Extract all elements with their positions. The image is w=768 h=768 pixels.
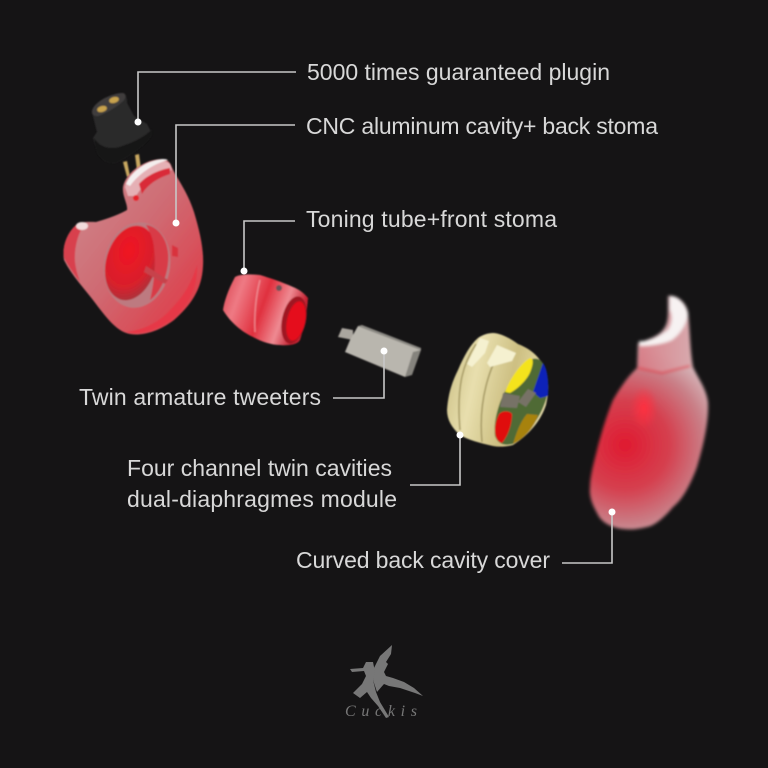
icon: curved back cavity cover xyxy=(590,296,708,529)
logo: fairy Cuckis: Cuckis xyxy=(345,703,417,720)
label: tweeters: Twin armature tweeters xyxy=(79,384,321,410)
leader: plugin xyxy=(134,72,296,126)
label: module: dual-diaphragmes module xyxy=(127,486,397,512)
leader: module xyxy=(410,432,464,485)
label: module: Four channel twin cavities xyxy=(127,455,392,481)
icon: dual diaphragm module xyxy=(447,333,548,447)
label: tube: Toning tube+front stoma xyxy=(306,206,557,232)
label: cover: Curved back cavity cover xyxy=(296,547,550,573)
icon: CNC aluminum cavity shell xyxy=(64,159,203,334)
label: module xyxy=(127,455,397,512)
label: plugin: 5000 times guaranteed plugin xyxy=(307,59,610,85)
label: cavity: CNC aluminum cavity+ back stoma xyxy=(306,113,658,139)
leader: cover xyxy=(562,508,616,563)
leader: cavity xyxy=(172,125,295,226)
icon: plugin connector xyxy=(92,93,152,177)
icon: armature tweeter xyxy=(338,325,421,377)
leader: tweeters xyxy=(333,348,388,398)
leader: tube xyxy=(240,221,295,274)
icon: toning tube xyxy=(223,274,311,346)
logo: fairy Cuckis xyxy=(345,645,423,720)
